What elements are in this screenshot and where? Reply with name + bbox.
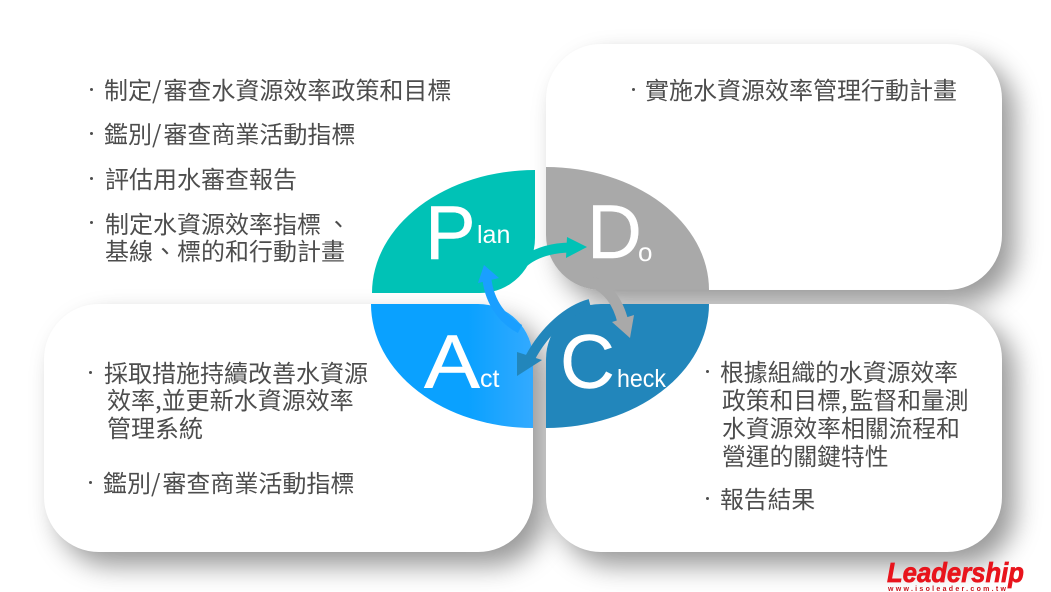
label: Plan: lan bbox=[477, 221, 510, 249]
quadrant: check bbox=[383, 180, 709, 428]
panel: check bbox=[546, 304, 1002, 552]
arrow: do to check bbox=[592, 282, 634, 338]
text: check items: 報告結果 bbox=[720, 480, 815, 515]
arrow: plan to do bbox=[524, 237, 587, 262]
label: Act bbox=[424, 320, 500, 405]
label: Plan: P bbox=[425, 191, 476, 276]
text: check items: 水資源效率相關流程和 bbox=[722, 409, 960, 444]
text: act items: 管理系統 bbox=[107, 409, 203, 444]
text: plan items: 評估用水審查報告 bbox=[105, 160, 297, 195]
arrow: act to plan bbox=[478, 265, 520, 329]
logo: Leadership: Leadership bbox=[887, 557, 1024, 588]
text: check items: 營運的關鍵特性 bbox=[722, 437, 889, 472]
text: act items bbox=[89, 354, 368, 499]
panel: act bbox=[44, 304, 533, 552]
text: plan items: 基線、標的和行動計畫 bbox=[105, 232, 345, 267]
text: check items: 政策和目標,監督和量測 bbox=[722, 381, 969, 416]
text: act items: 鑑別/審查商業活動指標 bbox=[103, 464, 354, 499]
quadrant: plan bbox=[372, 170, 698, 416]
quadrant: act bbox=[371, 180, 695, 428]
text: do items: 實施水資源效率管理行動計畫 bbox=[645, 71, 957, 106]
panel: do bbox=[546, 44, 1002, 290]
text: plan items bbox=[90, 71, 451, 267]
label: Act: A bbox=[424, 320, 480, 405]
panel: plan bbox=[44, 44, 535, 293]
quadrant: do bbox=[383, 167, 709, 413]
text: act items: 效率,並更新水資源效率 bbox=[107, 381, 354, 416]
text: plan items: 鑑別/審查商業活動指標 bbox=[104, 115, 355, 150]
text: check items: 根據組織的水資源效率 bbox=[720, 353, 958, 388]
text: plan items: 制定/審查水資源效率政策和目標 bbox=[104, 71, 451, 106]
label: Do: o bbox=[638, 237, 652, 267]
text: act items: 採取措施持續改善水資源 bbox=[104, 354, 368, 389]
arrow: check to act bbox=[517, 304, 590, 376]
label: Check bbox=[560, 320, 666, 405]
label: Check: C bbox=[560, 320, 615, 405]
label: Plan bbox=[425, 191, 510, 276]
label: Do: D bbox=[587, 190, 642, 275]
label: Act: ct bbox=[480, 365, 500, 393]
text: plan items: 制定水資源效率指標 、 bbox=[105, 205, 350, 240]
label: Check: heck bbox=[617, 365, 666, 393]
